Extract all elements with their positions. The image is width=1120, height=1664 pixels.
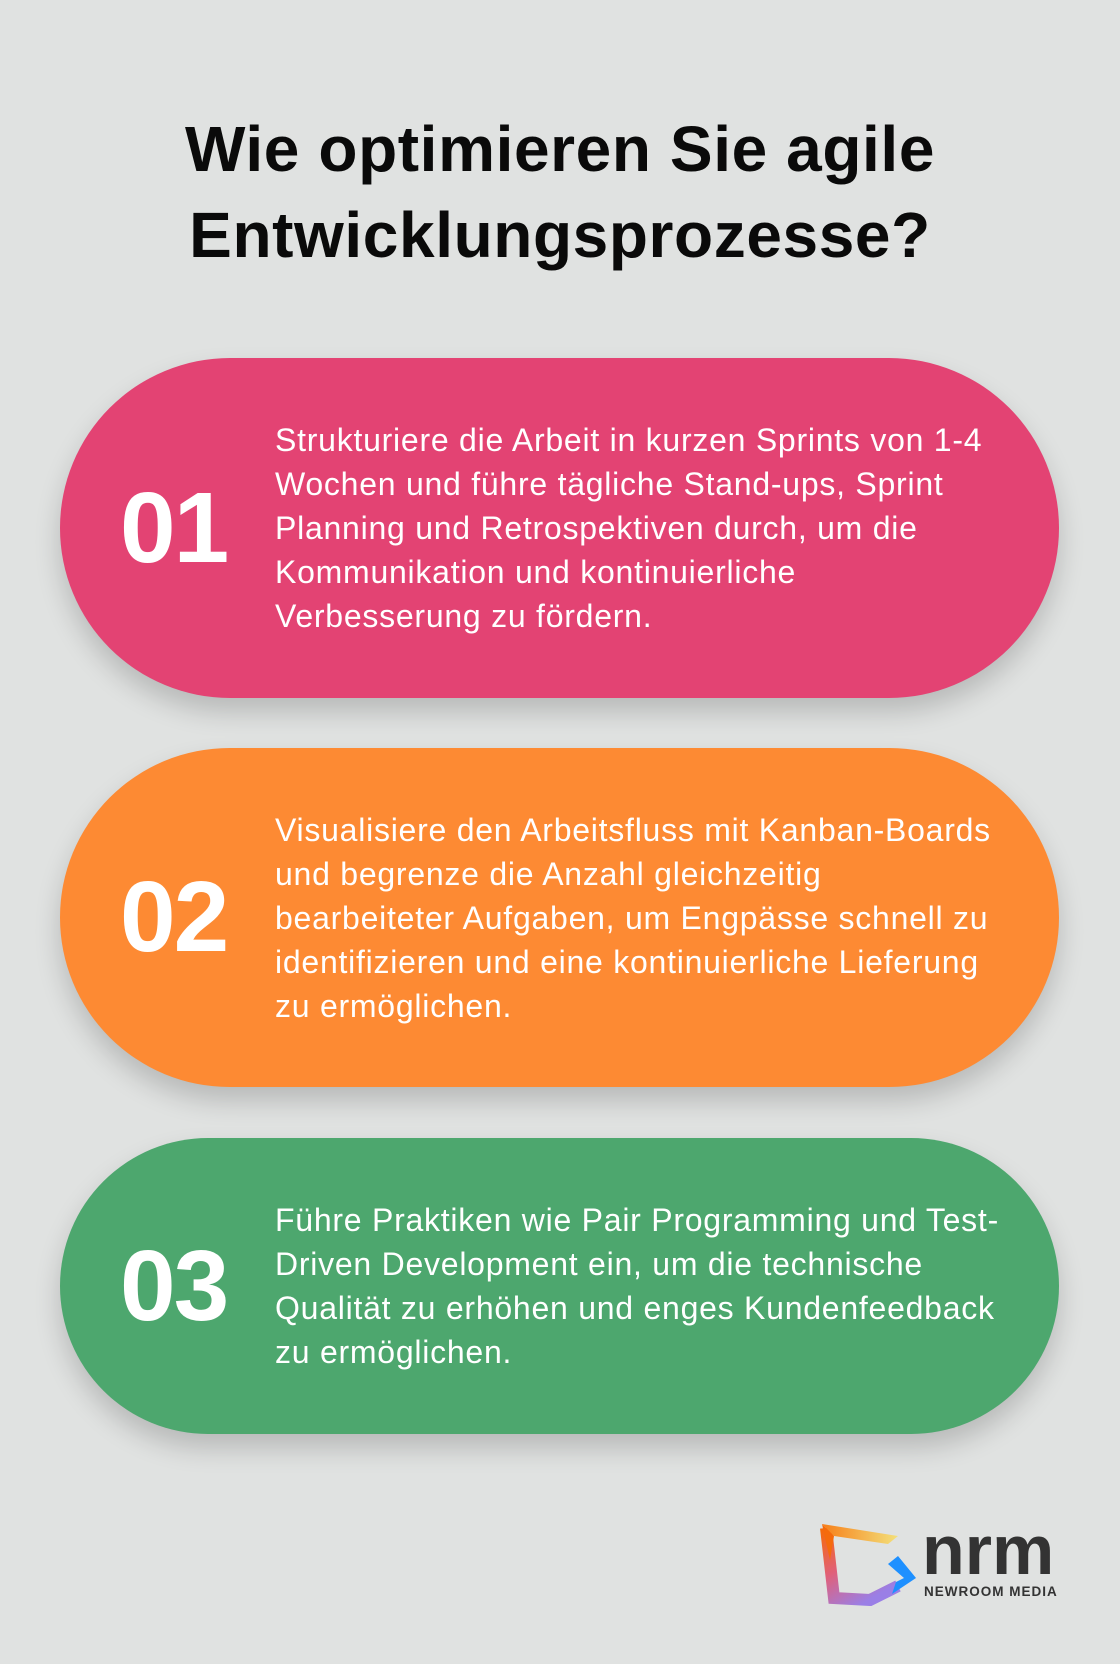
text 02: und begrenze die Anzahl gleichzeitig	[275, 856, 821, 892]
number 02: 02	[120, 861, 227, 973]
panel: step 02	[60, 748, 1059, 1087]
text 01: Planning und Retrospektiven durch, um die	[275, 510, 918, 546]
title	[185, 113, 935, 271]
number 03: 03	[120, 1230, 227, 1342]
text 02: identifizieren und eine kontinuierliche Lieferung	[275, 944, 979, 980]
text 02: zu ermöglichen.	[275, 988, 512, 1024]
text 03	[275, 1202, 999, 1370]
text 03: Führe Praktiken wie Pair Programming und Test-	[275, 1202, 999, 1238]
logo: NEWROOM MEDIA	[924, 1584, 1058, 1599]
text 03: Qualität zu erhöhen und enges Kundenfeedback	[275, 1290, 995, 1326]
number 01: 01	[120, 472, 227, 584]
text 01: Kommunikation und kontinuierliche	[275, 554, 796, 590]
text 01	[275, 422, 982, 634]
text 01: Wochen und führe tägliche Stand-ups, Sprint	[275, 466, 944, 502]
text 03: Driven Development ein, um die technische	[275, 1246, 923, 1282]
text 02	[275, 812, 991, 1024]
panel: step 01	[60, 358, 1059, 698]
text 01: Verbesserung zu fördern.	[275, 598, 652, 634]
text 03: zu ermöglichen.	[275, 1334, 512, 1370]
text 01: Strukturiere die Arbeit in kurzen Sprints von 1-4	[275, 422, 982, 458]
title: Wie optimieren Sie agile	[185, 113, 935, 185]
icon: logo mark	[820, 1524, 916, 1606]
text 02: bearbeiteter Aufgaben, um Engpässe schnell zu	[275, 900, 988, 936]
panel: step 03	[60, 1138, 1059, 1434]
title: Entwicklungsprozesse?	[189, 199, 931, 271]
text 02: Visualisiere den Arbeitsfluss mit Kanban-Boards	[275, 812, 991, 848]
logo	[820, 1511, 1058, 1606]
logo text: nrm	[922, 1511, 1054, 1589]
